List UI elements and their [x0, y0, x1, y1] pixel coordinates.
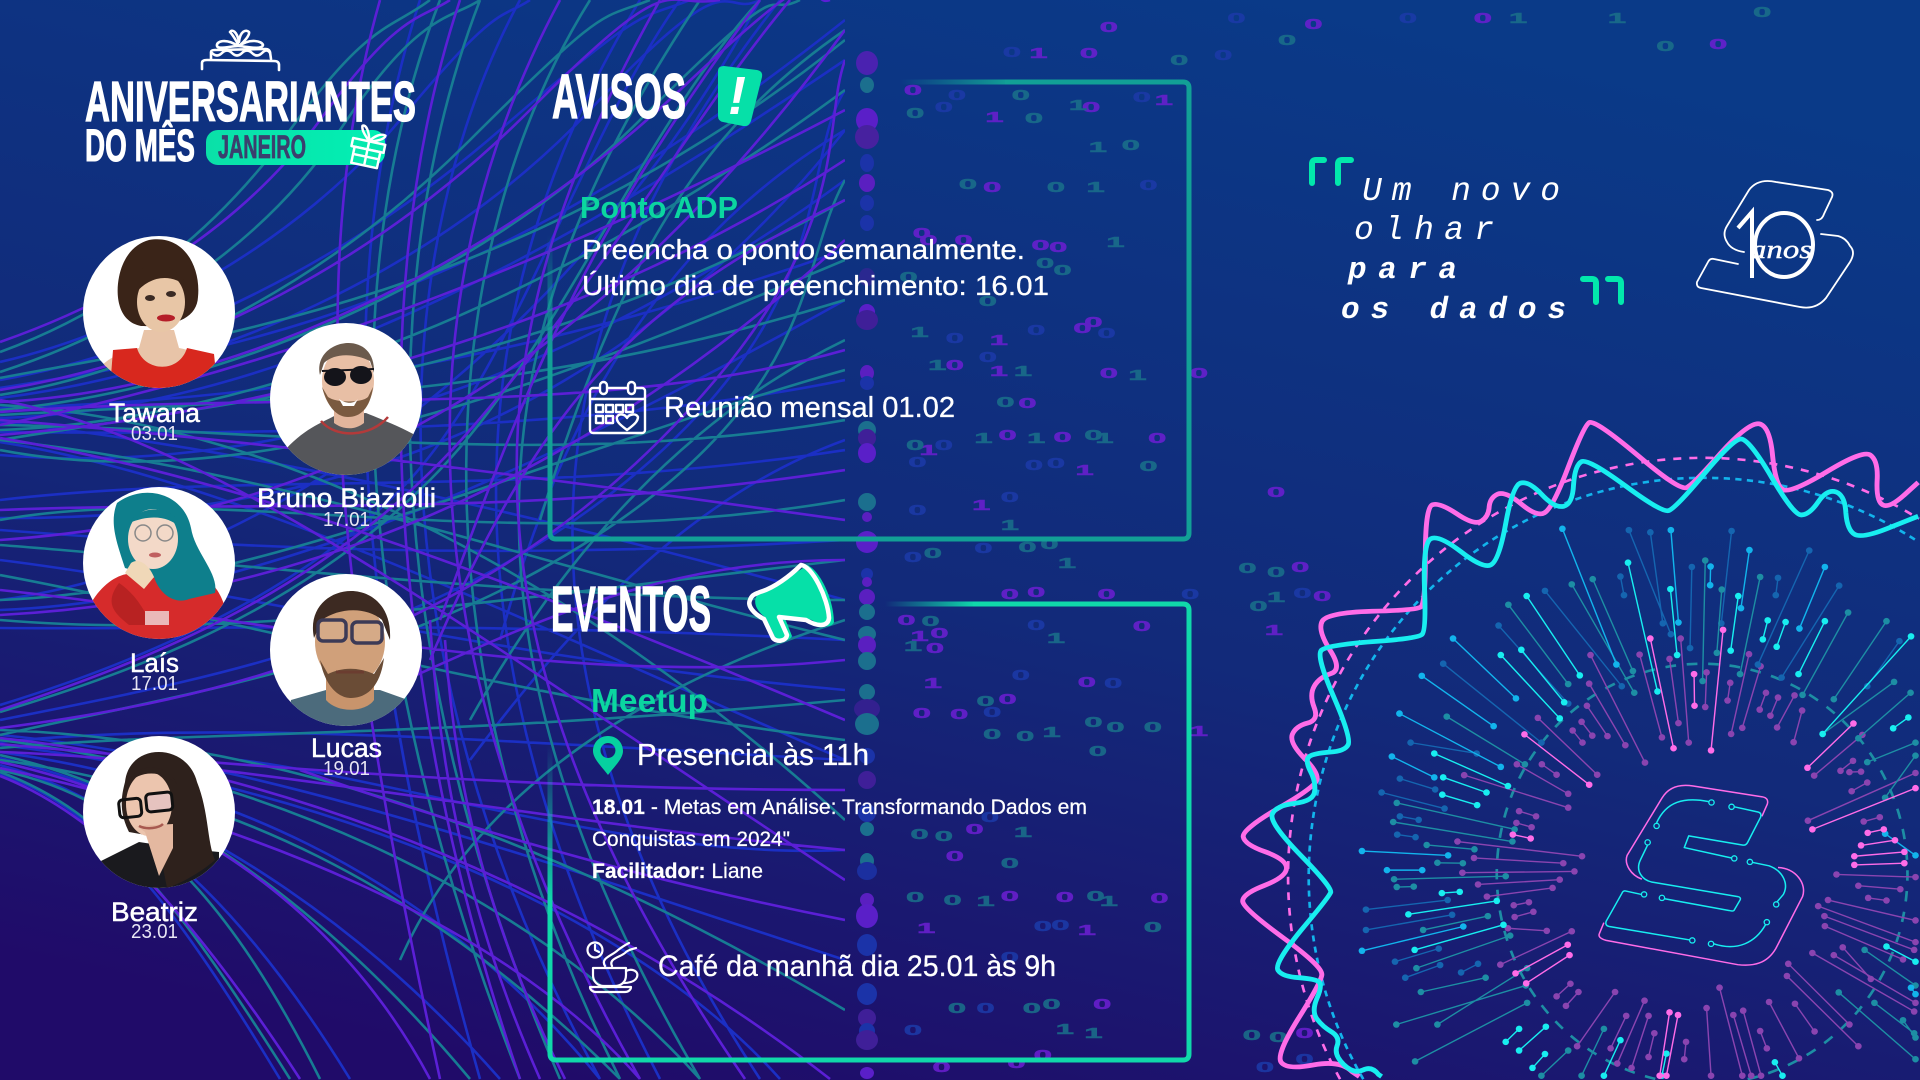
icon: exclamation badge	[718, 66, 762, 126]
name: Laís: 17.01	[131, 673, 178, 695]
open quote marks	[1312, 160, 1351, 183]
vertical strip of dots	[854, 51, 880, 1079]
binary digits background: 0000000000000000000000000000000000	[904, 10, 1417, 1076]
name: Beatriz: Beatriz	[111, 897, 198, 927]
text: ponto adp	[580, 190, 1049, 301]
title: aniversariantes do mês: DO MÊS	[85, 120, 195, 171]
name: Lucas	[311, 733, 382, 780]
text: meetup details	[592, 796, 1087, 883]
text: presencial: Presencial às 11h	[637, 737, 869, 772]
logo: 10 anos: anos	[1750, 235, 1812, 264]
quote text: para	[1347, 253, 1457, 288]
name: Laís	[130, 648, 179, 695]
graphic: radial data burst	[1243, 422, 1919, 1079]
text: meetup details: 18.01 - Metas em Análise: Transformando Dados em	[592, 796, 1087, 819]
text: ponto adp: Preencha o ponto semanalmente.	[582, 234, 1025, 265]
name: Tawana	[109, 398, 201, 445]
person: Laís	[83, 487, 235, 639]
binary digits background: 01011000000100010001010001100000000000000000011111111111100000101001	[899, 4, 1771, 1046]
name: Laís: Laís	[130, 648, 179, 678]
radial lines teal	[1393, 560, 1915, 1076]
title: aniversariantes do mês	[85, 70, 416, 171]
name: Bruno Biaziolli: Bruno Biaziolli	[257, 483, 436, 513]
panel: eventos border	[550, 604, 1189, 1060]
text: ponto adp: Último dia de preenchimento: 16.01	[582, 270, 1049, 301]
name: Bruno Biaziolli: 17.01	[323, 509, 370, 531]
pill: janeiro: JANEIRO	[218, 129, 306, 165]
dashed rings	[1288, 458, 1919, 1079]
text: meetup details: Conquistas em 2024"	[592, 828, 790, 851]
person: Tawana	[83, 236, 235, 388]
title: aniversariantes do mês: ANIVERSARIANTES	[85, 70, 416, 134]
logo: 10 anos	[1697, 181, 1853, 308]
heading: eventos: EVENTOS	[551, 573, 711, 645]
person: Bruno Biaziolli	[270, 323, 422, 475]
pink wave	[1243, 422, 1918, 1077]
text: reunião mensal: Reunião mensal 01.02	[664, 392, 955, 424]
name: Bruno Biaziolli	[257, 483, 436, 531]
panel: avisos border	[550, 82, 1189, 539]
radial lines bright pink	[1513, 630, 1915, 1076]
icon: cake	[202, 31, 279, 70]
quote text	[1341, 173, 1566, 328]
name: Lucas: 19.01	[323, 758, 370, 780]
binary digits background: 000100000000000000011111110001000010000100000011000000000100	[897, 10, 1727, 1076]
person: Lucas	[270, 574, 422, 726]
text: meetup details: Facilitador: Liane	[592, 860, 763, 883]
background wires	[0, 0, 845, 1079]
quote text: os dados	[1341, 293, 1566, 328]
person: Beatriz	[83, 736, 235, 888]
name: Tawana: Tawana	[109, 398, 201, 428]
icon: megaphone	[749, 565, 834, 641]
close quote marks	[1583, 279, 1621, 302]
quote text: Um novo	[1362, 173, 1560, 210]
text: ponto adp: Ponto ADP	[580, 190, 738, 225]
heading: avisos: AVISOS	[552, 62, 686, 132]
cyan wave	[1272, 439, 1918, 1077]
text: meetup: Meetup	[591, 682, 708, 719]
radial lines dim blue	[1366, 530, 1899, 978]
quote: um novo olhar para os dados	[1312, 160, 1621, 328]
name: Beatriz: 23.01	[131, 921, 178, 943]
name: Lucas: Lucas	[311, 733, 382, 763]
radial lines dim purple	[1457, 639, 1915, 1076]
name: Beatriz	[111, 897, 198, 943]
icon: location pin	[593, 736, 623, 775]
text: café da manhã: Café da manhã dia 25.01 às 9h	[658, 950, 1056, 983]
name: Tawana: 03.01	[131, 423, 178, 445]
icon: calendar	[590, 382, 645, 433]
radial lines cyan	[1408, 563, 1915, 1076]
icon: gift	[348, 124, 388, 169]
icon: exclamation badge: !	[728, 66, 746, 126]
icon: coffee	[588, 942, 637, 992]
radial lines bright blue	[1362, 529, 1915, 994]
S logo outline	[1599, 785, 1804, 965]
quote text: olhar	[1354, 212, 1494, 249]
